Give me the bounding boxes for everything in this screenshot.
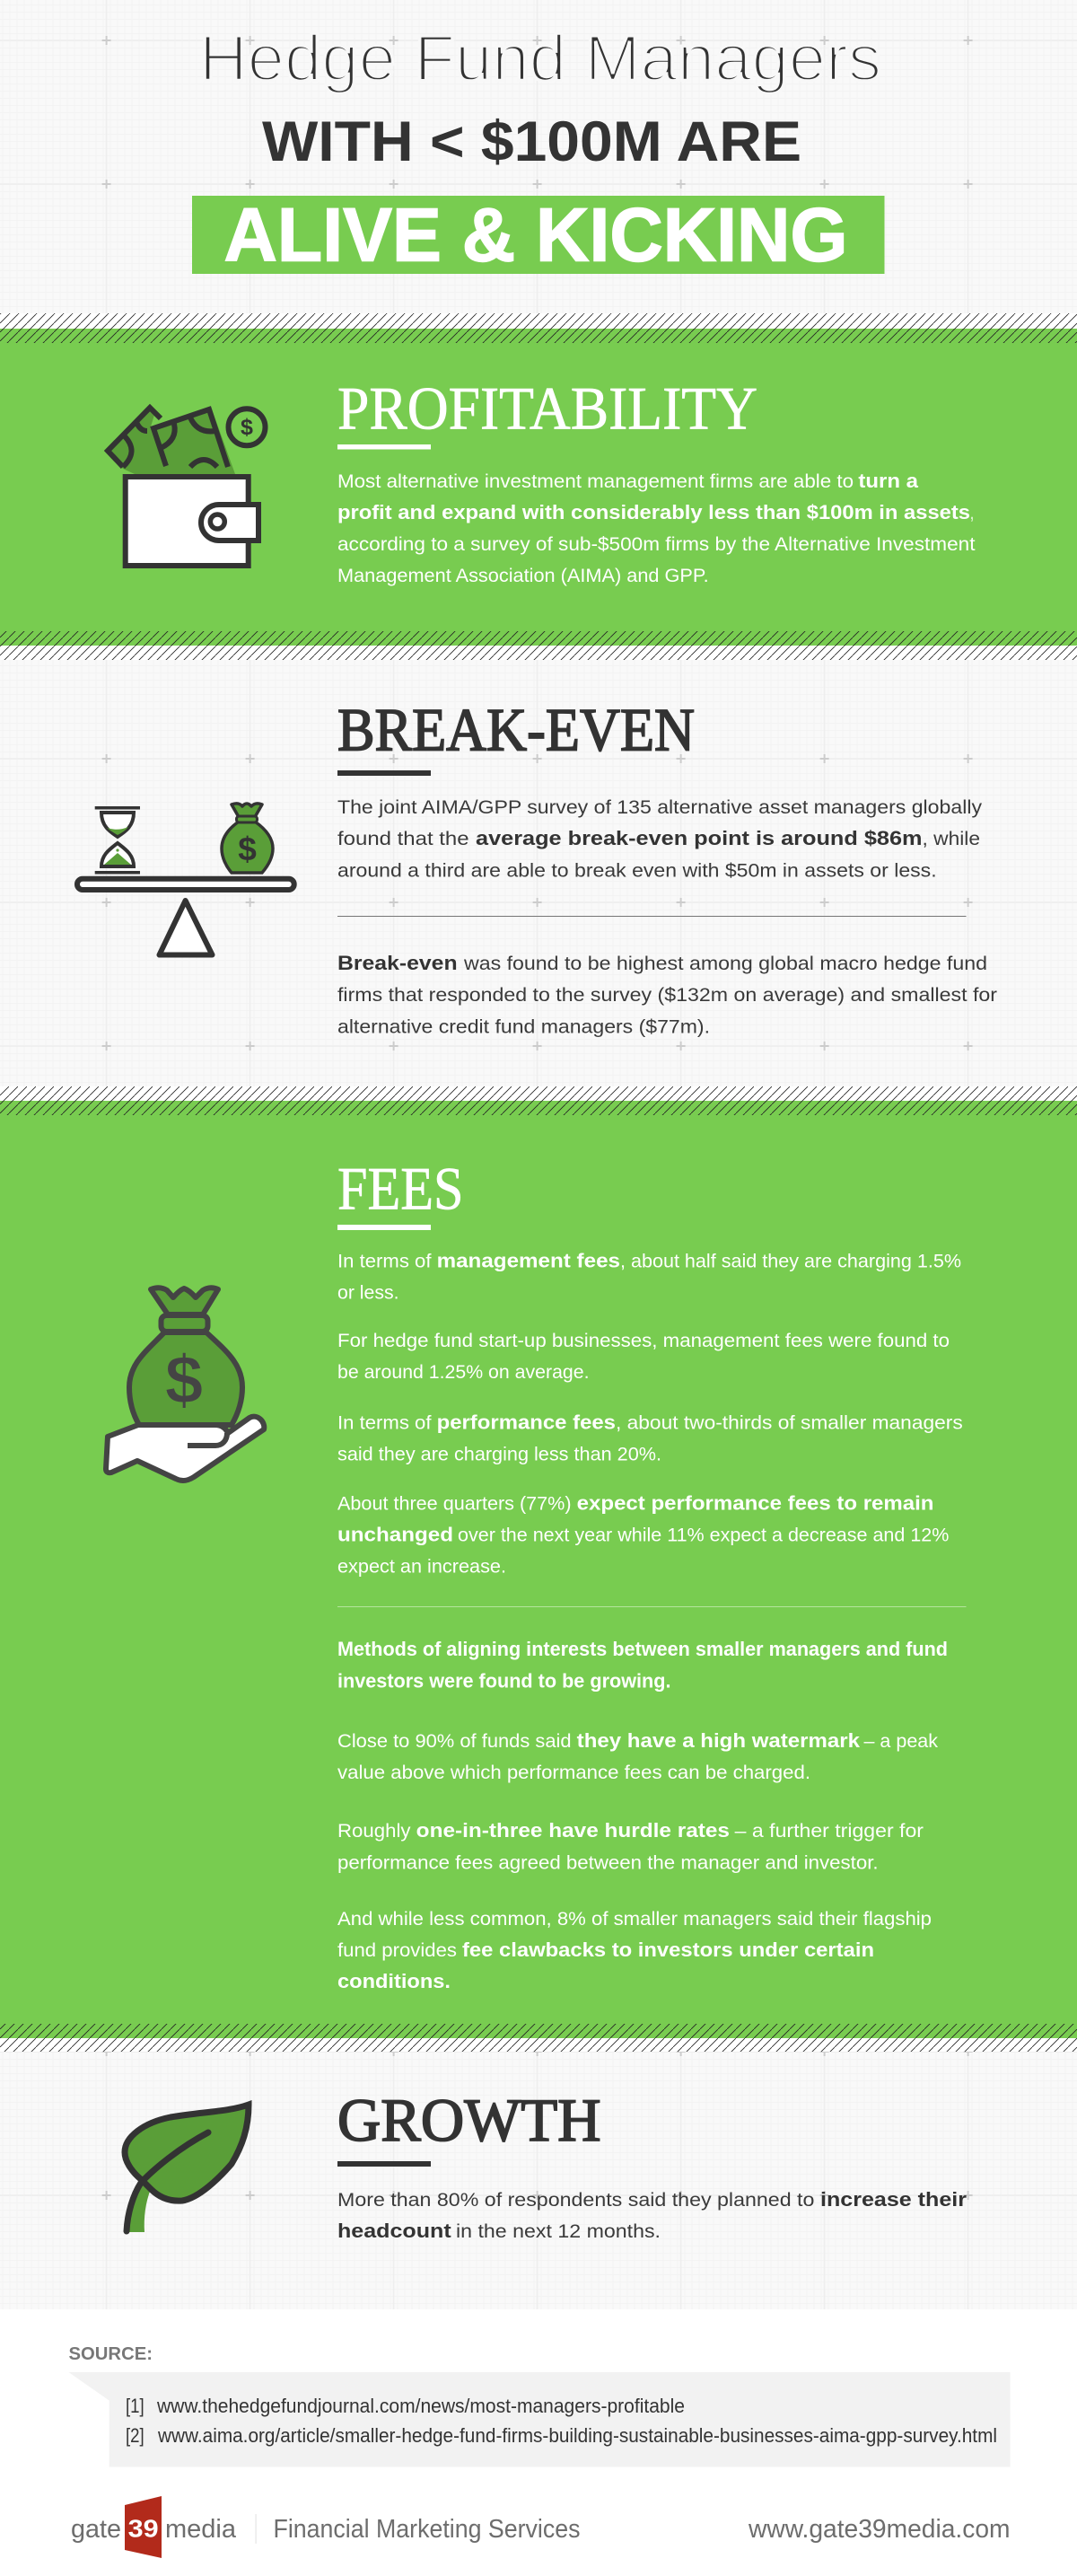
text block: break-even by strategy: alternative credit fund managers ($77m). — [337, 1016, 710, 1038]
icon: wallet with cash: $ — [241, 415, 253, 440]
text block: break-even survey: The joint AIMA/GPP survey of 135 alternative asset managers globally — [337, 797, 983, 818]
text block: fee levels: said they are charging less than 20%. — [337, 1445, 661, 1465]
heading: profitability: PROFITABILITY — [337, 374, 757, 442]
icon: hand holding money bag — [106, 1288, 264, 1481]
text block: aligning interests: performance fees agreed between the manager and investor. — [337, 1853, 879, 1874]
text block: fee levels: or less. — [337, 1283, 398, 1304]
source box: www.thehedgefundjournal.com/news/most-managers-profitable — [156, 2395, 685, 2417]
icon: wallet with cash — [106, 406, 266, 566]
text block: break-even by strategy — [337, 952, 997, 1038]
text block: fee levels: About three quarters (77%) — [337, 1494, 572, 1515]
footer — [71, 2496, 1011, 2558]
text block: aligning interests: conditions. — [337, 1970, 451, 1992]
text block: break-even survey: found that the — [337, 829, 469, 849]
title green banner — [192, 196, 885, 274]
heading rule — [337, 770, 431, 776]
panel: break-even — [77, 696, 997, 1038]
heading rule — [337, 1225, 431, 1230]
text block: aligning interests: fee clawbacks to investors under certain — [462, 1939, 874, 1961]
text block: fee levels: over the next year while 11% expect a decrease and 12% — [458, 1525, 949, 1546]
text block: growth: headcount — [337, 2220, 451, 2242]
text block: break-even survey: , while — [923, 829, 980, 849]
text block: profitability: profit and expand with considerably less than $100m in assets — [337, 501, 970, 523]
text block: fee levels: unchanged — [337, 1524, 453, 1546]
panel: fees — [0, 1086, 1077, 2052]
text block: fee levels: expect an increase. — [337, 1557, 506, 1578]
icon: leaf — [125, 2105, 249, 2232]
text block: aligning interests: – a further trigger for — [735, 1821, 924, 1842]
text block: aligning interests: Close to 90% of funds said — [337, 1731, 572, 1752]
text block: aligning interests: And while less common, 8% of smaller managers said their flagship — [337, 1909, 932, 1930]
text block: profitability: , — [970, 503, 974, 523]
text block: aligning interests: – a peak — [863, 1731, 938, 1752]
text block: fee levels: For hedge fund start-up businesses, management fees were found to — [337, 1331, 950, 1351]
heading: growth: GROWTH — [337, 2086, 601, 2154]
heading rule — [337, 2161, 431, 2167]
title line 2: WITH < $100M ARE — [262, 110, 801, 173]
tagline: Financial Marketing Services — [273, 2515, 580, 2544]
logo: gate39media: media — [165, 2515, 237, 2544]
text block: aligning interests — [337, 1638, 948, 1992]
text block: aligning interests: Roughly — [337, 1821, 411, 1842]
text block: growth: More than 80% of respondents said they planned to — [337, 2190, 814, 2211]
source box — [68, 2372, 1011, 2467]
text block: break-even by strategy: was found to be highest among global macro hedge fund — [463, 954, 987, 974]
text block: aligning interests: one-in-three have hurdle rates — [416, 1819, 730, 1842]
text block: fee levels: , about two-thirds of smaller managers — [616, 1413, 963, 1434]
logo: gate39media: gate — [71, 2515, 121, 2544]
text block: fee levels: expect performance fees to remain — [577, 1492, 933, 1515]
text block: growth: in the next 12 months. — [456, 2221, 661, 2242]
text block: fee levels: , about half said they are charging 1.5% — [620, 1252, 961, 1272]
panel: profitability — [0, 313, 1077, 660]
title banner text: ALIVE & KICKING — [224, 192, 847, 277]
source box: [2] — [126, 2424, 144, 2447]
text block: growth: increase their — [820, 2188, 967, 2211]
text block: fee levels: In terms of — [337, 1252, 432, 1272]
text block: aligning interests: they have a high watermark — [577, 1729, 861, 1752]
text block: break-even survey — [337, 797, 983, 881]
text block: fee levels: management fees — [437, 1250, 620, 1272]
text block: fee levels: performance fees — [437, 1411, 616, 1434]
text block: aligning interests: investors were found to be growing. — [337, 1669, 671, 1692]
text block: profitability: Most alternative investment management firms are able to — [337, 471, 854, 492]
source box: www.aima.org/article/smaller-hedge-fund-firms-building-sustainable-businesses-aima-gpp-survey.html — [157, 2424, 997, 2447]
text block: fee levels: In terms of — [337, 1413, 432, 1434]
text block: break-even survey: average break-even point is around $86m — [476, 827, 923, 849]
text block: profitability: turn a — [858, 470, 919, 492]
icon: balance scale with hourglass and money bag — [77, 804, 294, 955]
text block: break-even by strategy: Break-even — [337, 952, 458, 974]
title — [192, 23, 885, 277]
text block: fee levels — [337, 1250, 963, 1578]
text block: aligning interests: Methods of aligning interests between smaller managers and fund — [337, 1638, 948, 1660]
icon: balance scale with hourglass and money bag: $ — [238, 831, 257, 867]
panel: growth — [125, 2086, 967, 2242]
heading: break-even: BREAK-EVEN — [337, 696, 695, 764]
text block: profitability: Management Association (AIMA) and GPP. — [337, 566, 709, 586]
text block: profitability: according to a survey of sub-$500m firms by the Alternative Investment — [337, 534, 976, 555]
logo: gate39media: 39 — [128, 2515, 159, 2543]
text block: growth — [337, 2188, 967, 2242]
logo: gate39media — [71, 2496, 237, 2558]
source box: [1] — [126, 2395, 144, 2417]
text block: profitability — [337, 470, 976, 586]
website: www.gate39media.com — [748, 2515, 1011, 2544]
text block: aligning interests: value above which performance fees can be charged. — [337, 1763, 810, 1783]
text block: aligning interests: fund provides — [337, 1940, 457, 1961]
text block: break-even survey: around a third are able to break even with $50m in assets or less. — [337, 860, 937, 881]
title line 1: Hedge Fund Managers — [199, 23, 881, 95]
heading rule — [337, 444, 431, 449]
text block: fee levels: be around 1.25% on average. — [337, 1362, 589, 1383]
text block: break-even by strategy: firms that responded to the survey ($132m on average) and smallest for — [337, 985, 997, 1006]
source heading: SOURCE: — [68, 2344, 153, 2364]
icon: hand holding money bag: $ — [165, 1342, 203, 1419]
heading: fees: FEES — [337, 1155, 463, 1223]
